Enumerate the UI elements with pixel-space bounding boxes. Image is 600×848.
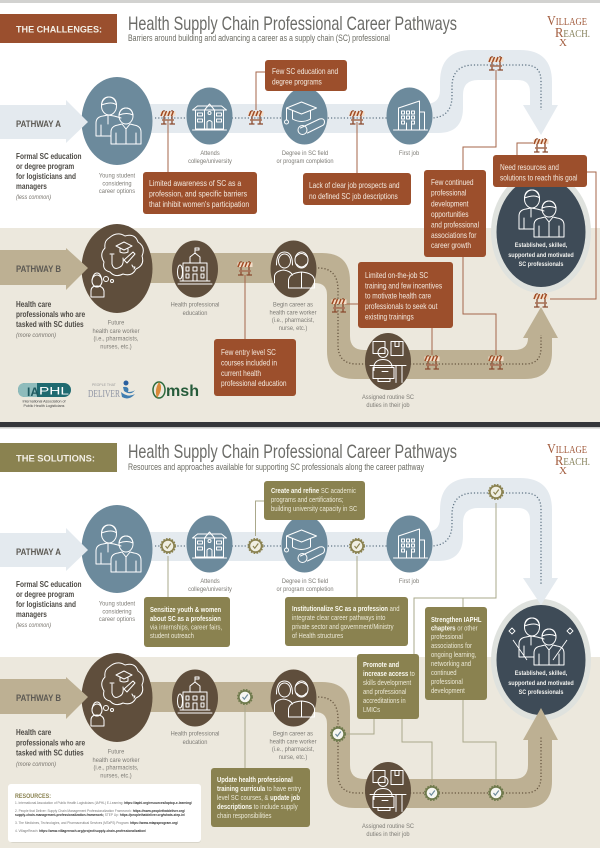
- beige band for pathway B: [0, 657, 600, 848]
- caption: begin career: health care worker: [270, 738, 316, 746]
- icon: routine duties: [365, 333, 411, 390]
- resources list: 1. International Association of Public Health Logisticians (IAPHL) E-Learning: https://iaphl.org/resources/laptop-e-learning/: [15, 801, 192, 805]
- caption: begin career: (i.e., pharmacist,: [272, 746, 314, 753]
- callout: update curricula: descriptions to include supply: [217, 804, 298, 811]
- logo: VillageReach: [547, 14, 590, 49]
- caption: degree: or program completion: [276, 158, 334, 165]
- callout: sensitize youth: [144, 597, 230, 647]
- callout: update curricula: level SC courses, & update job: [217, 795, 300, 802]
- callout: strengthen IAPHL: professional: [431, 679, 463, 686]
- caption: young student: career options: [99, 616, 135, 623]
- callout: institutionalize: Institutionalize SC as a profession and: [292, 606, 400, 613]
- caption: goal: SC professionals: [519, 690, 564, 696]
- pathway B arrow start: [0, 248, 88, 290]
- callout: promote access: skills development: [363, 680, 411, 687]
- pathway B arrow start: [0, 677, 88, 719]
- callout: few continued development: and professional: [431, 220, 479, 230]
- caption: future worker: health care worker: [93, 757, 139, 764]
- pathway A arrow band: [150, 50, 558, 135]
- panel: the challenges: [0, 13, 600, 422]
- icon: future health worker: [82, 224, 152, 313]
- callout: limited on-the-job: existing trainings: [365, 312, 414, 322]
- logo: VillageReach: REACH.: [555, 26, 590, 41]
- callout: strengthen IAPHL: professional: [431, 634, 463, 641]
- callout: create and refine: programs and certifications;: [271, 497, 344, 504]
- callout: strengthen IAPHL: continued: [431, 670, 457, 677]
- callout: few SC education: degree programs: [272, 77, 322, 87]
- caption: first job: First job: [399, 150, 420, 157]
- callout: few entry level: courses included in: [221, 358, 277, 368]
- logo: IAPHL: IA: [27, 385, 39, 399]
- logo: People that Deliver: PEOPLE THAT: [92, 383, 117, 387]
- caption: begin career: Begin career as: [273, 730, 313, 738]
- callout: few continued development: Few continued: [431, 177, 474, 187]
- pathway A arrow start: [0, 100, 88, 143]
- text: pathway B description: Health care: [16, 727, 51, 737]
- callout: strengthen IAPHL: ongoing learning,: [431, 652, 476, 659]
- caption: young student: considering: [102, 180, 132, 188]
- text: pathway A description: Formal SC education: [16, 579, 81, 589]
- text: pathway B description: tasked with SC duties: [16, 748, 84, 758]
- callout: need resources: [493, 155, 587, 187]
- callout: few continued development: opportunities: [431, 209, 469, 219]
- header tag: the challenges: THE CHALLENGES:: [16, 24, 102, 36]
- callout: promote access: LMICs: [363, 707, 381, 714]
- caption: begin career: nurse, etc.): [279, 325, 307, 332]
- pathway B dotted route: [318, 268, 541, 364]
- caption: future worker: nurses, etc.): [100, 772, 132, 780]
- logo: IAPHL: International Association of: [23, 400, 65, 404]
- callout: strengthen IAPHL: associations for: [431, 643, 473, 650]
- caption: young student: Young student: [99, 600, 135, 608]
- label: pathway B: PATHWAY B: [16, 693, 61, 704]
- caption: attends: Attends: [200, 578, 220, 585]
- logo: VillageReach: VILLAGE: [547, 14, 587, 29]
- callout: limited awareness: profession, and specific barriers: [149, 189, 247, 199]
- callout: create and refine: building university capacity in SC: [271, 506, 357, 513]
- callout: strengthen IAPHL: networking and: [431, 661, 471, 668]
- caption: future worker: (i.e., pharmacists,: [93, 764, 139, 772]
- caption: future worker: health care worker: [93, 328, 139, 335]
- callout: limited on-the-job: training and few incentives: [365, 281, 442, 291]
- logo: VillageReach: [547, 442, 590, 477]
- resources list: 2. People that Deliver: Supply Chain Management Professionalization Framework: https://www.peoplethatdeliver.org/: [15, 809, 185, 813]
- icon: future health worker: [82, 653, 152, 742]
- callout: lack of clear job prospects: [303, 173, 411, 205]
- resources list: 3. The Medicines, Technologies, and Pharmaceutical Services (MTaPS) Program: https://www.mtapsprogram.org/: [15, 821, 178, 825]
- callout: institutionalize: integrate clear career pathways into: [292, 615, 386, 622]
- caption: future worker: (i.e., pharmacists,: [93, 335, 139, 343]
- icon: routine duties: [365, 762, 411, 819]
- callout: limited awareness: [143, 172, 257, 214]
- caption: health education: education: [183, 739, 207, 746]
- icon: college: [186, 516, 232, 572]
- caption: goal: Established, skilled,: [515, 671, 568, 677]
- callout: update curricula: Update health professional: [217, 777, 293, 784]
- caption: degree: Degree in SC field: [282, 578, 328, 585]
- icon: young student circle: [82, 77, 152, 165]
- callout: limited awareness: that inhibit women's participation: [149, 200, 249, 209]
- caption: routine duties: Assigned routine SC: [362, 394, 415, 401]
- caption: young student: considering: [102, 608, 132, 616]
- callout: promote access: accreditations in: [363, 698, 406, 705]
- callout: limited awareness: Limited awareness of SC as a: [149, 179, 242, 188]
- text: pathway B description: professionals who are: [16, 309, 85, 319]
- caption: routine duties: Assigned routine SC: [362, 823, 415, 830]
- caption: degree: Degree in SC field: [282, 150, 328, 157]
- callout: few continued development: professional: [431, 188, 467, 198]
- callout: limited on-the-job: professionals to seek out: [365, 301, 437, 311]
- panel: resources: [8, 784, 201, 843]
- caption: degree: or program completion: [276, 586, 334, 593]
- caption: begin career: nurse, etc.): [279, 754, 307, 761]
- icon: health education: [172, 240, 218, 298]
- divider bar between panels: [0, 422, 600, 427]
- callout: few entry level: professional education: [221, 378, 286, 388]
- text: pathway A description: or degree program: [16, 589, 75, 599]
- logo: IAPHL: Public Health Logisticians: [24, 404, 65, 408]
- callout: institutionalize: of Health structures: [292, 633, 344, 640]
- resources list: 4. VillageReach: https://www.villagereach.org/project/supply-chain-professionalization/: [15, 829, 146, 833]
- caption: health education: Health professional: [171, 730, 219, 738]
- callout: few continued development: career growth: [431, 240, 471, 250]
- subtitle: Barriers around building and advancing a career as a supply chain (SC) professional: [128, 33, 390, 43]
- resources list: [15, 801, 192, 833]
- pathway A dotted route: [155, 65, 541, 118]
- callout: sensitize youth: student outreach: [150, 633, 194, 640]
- callout: limited on-the-job: Limited on-the-job SC: [365, 270, 428, 280]
- callout: promote access: increase access to: [363, 671, 415, 678]
- callout: limited on-the-job: to motivate health care: [365, 291, 431, 301]
- logo: VillageReach: X: [559, 465, 567, 477]
- text: pathway A description: or degree program: [16, 161, 75, 171]
- logo: msh: [153, 382, 199, 400]
- subtitle: Resources and approaches available for supporting SC professionals along the career pathway: [128, 462, 424, 472]
- barrier icons: [160, 56, 548, 369]
- connectors: [168, 70, 596, 355]
- text: less common: (less common): [16, 195, 51, 201]
- callout: sensitize youth: via internships, career fairs,: [150, 624, 222, 632]
- callout: few continued development: [424, 170, 486, 257]
- callout: create and refine: [264, 481, 365, 520]
- text: pathway A description: managers: [16, 609, 47, 619]
- callout: lack of clear job prospects: no defined SC job descriptions: [309, 191, 398, 201]
- icon: degree: [282, 88, 328, 144]
- logo: People that Deliver: DELIVER: [88, 389, 120, 400]
- callout: promote access: and professional: [363, 689, 407, 696]
- logo: IAPHL: [18, 383, 71, 408]
- icon: first job: [386, 88, 432, 144]
- logo: VillageReach: X: [559, 37, 567, 49]
- logo: VillageReach: VILLAGE: [547, 442, 587, 457]
- callout: need resources: Need resources and: [500, 162, 559, 172]
- caption: goal: supported and motivated: [508, 681, 574, 687]
- panel: the solutions: [0, 441, 600, 848]
- header tag: the challenges: [0, 14, 117, 43]
- text: pathway B description: Health care: [16, 299, 51, 309]
- callout: update curricula: chain responsibilities: [217, 813, 272, 820]
- callout: lack of clear job prospects: Lack of clear job prospects and: [309, 180, 400, 190]
- pathway B arrow band: [150, 682, 558, 808]
- callout: institutionalize: private sector and government/Ministry: [292, 624, 394, 631]
- text: pathway B description: tasked with SC duties: [16, 319, 84, 329]
- caption: attends: college/university: [188, 158, 233, 165]
- caption: first job: First job: [399, 578, 420, 585]
- logo: IAPHL: PHL: [39, 386, 69, 398]
- icon: college: [186, 88, 232, 144]
- resources list: supply-chain-management-professionalization-framework; STEP Up: https://peoplethatdeliver.org/whats-step-in/: [15, 813, 185, 817]
- callout: institutionalize: [285, 597, 408, 646]
- title: Health Supply Chain Professional Career Pathways: [128, 13, 457, 35]
- callout: promote access: Promote and: [363, 662, 399, 669]
- caption: attends: Attends: [200, 150, 220, 157]
- pathway B arrow band: [150, 253, 558, 379]
- logo: VillageReach: REACH.: [555, 454, 590, 469]
- caption: goal: SC professionals: [519, 262, 564, 268]
- caption: attends: college/university: [188, 586, 233, 593]
- callout: few entry level: current health: [221, 368, 261, 378]
- caption: routine duties: duties in their job: [366, 402, 410, 409]
- icon: young student circle: [82, 505, 152, 593]
- connectors: [168, 501, 496, 784]
- caption: begin career: Begin career as: [273, 301, 313, 309]
- callout: sensitize youth: about SC as a profession: [150, 616, 221, 623]
- pathway B dotted route: [318, 697, 541, 793]
- logo: People that Deliver: [88, 380, 135, 400]
- header tag: the solutions: THE SOLUTIONS:: [16, 454, 95, 464]
- text: pathway A description: for logisticians and: [16, 599, 76, 609]
- caption: begin career: health care worker: [270, 309, 316, 317]
- callout: few continued development: associations for: [431, 230, 477, 240]
- icon: first job: [386, 516, 432, 572]
- caption: routine duties: duties in their job: [366, 831, 410, 838]
- callout: few entry level: [214, 339, 296, 396]
- caption: goal: Established, skilled,: [515, 243, 568, 249]
- caption: young student: career options: [99, 188, 135, 195]
- text: pathway A description: Formal SC education: [16, 151, 81, 161]
- caption: health education: education: [183, 310, 207, 317]
- label: pathway A: PATHWAY A: [16, 547, 61, 558]
- icon: begin career: [270, 240, 316, 298]
- callout: few continued development: development: [431, 199, 468, 209]
- callout: strengthen IAPHL: chapters or other: [431, 625, 478, 633]
- callout: strengthen IAPHL: development: [431, 688, 465, 695]
- caption: begin career: (i.e., pharmacist,: [272, 317, 314, 324]
- pathway A arrow start: [0, 528, 88, 571]
- resources heading: RESOURCES:: [15, 794, 51, 800]
- check badges: [161, 485, 503, 800]
- text: pathway B description: professionals who are: [16, 738, 85, 748]
- text: more common: (more common): [16, 333, 56, 339]
- text: less common: (less common): [16, 623, 51, 629]
- beige band for pathway B: [0, 228, 600, 422]
- caption: future worker: Future: [108, 748, 125, 756]
- callout: promote access: [357, 654, 419, 719]
- caption: future worker: Future: [108, 319, 125, 327]
- callout: strengthen IAPHL: Strengthen IAPHL: [431, 617, 481, 624]
- title: Health Supply Chain Professional Career Pathways: [128, 441, 457, 463]
- label: pathway A: PATHWAY A: [16, 119, 61, 130]
- callout: limited on-the-job: [358, 262, 453, 328]
- callout: create and refine: Create and refine SC academic: [271, 488, 356, 495]
- icon: begin career: [270, 670, 316, 726]
- caption: health education: Health professional: [171, 301, 219, 309]
- caption: future worker: nurses, etc.): [100, 343, 132, 351]
- header tag: the solutions: [0, 443, 117, 472]
- callout: update curricula: training curricula to have entry: [217, 786, 301, 793]
- pathway A dotted route: [155, 493, 541, 585]
- caption: young student: Young student: [99, 172, 135, 180]
- callout: few entry level: Few entry level SC: [221, 347, 276, 357]
- callout: update curricula: [211, 768, 310, 827]
- pathway A arrow band: [150, 478, 558, 605]
- icon: goal circle: [491, 171, 591, 293]
- top shadow strip: [0, 0, 600, 3]
- callout: strengthen IAPHL: [425, 607, 487, 700]
- callout: few SC education: [265, 60, 347, 91]
- icon: goal circle: [491, 599, 591, 721]
- icon: health education: [172, 670, 218, 726]
- text: more common: (more common): [16, 762, 56, 768]
- callout: few SC education: Few SC education and: [272, 66, 338, 76]
- caption: goal: supported and motivated: [508, 253, 574, 259]
- callout: sensitize youth: Sensitize youth & women: [150, 607, 221, 614]
- text: pathway A description: for logisticians and: [16, 171, 76, 181]
- callout: need resources: solutions to reach this goal: [500, 173, 578, 183]
- icon: degree: [282, 516, 328, 572]
- logo: msh: msh: [166, 383, 199, 400]
- text: pathway A description: managers: [16, 181, 47, 191]
- label: pathway B: PATHWAY B: [16, 264, 61, 275]
